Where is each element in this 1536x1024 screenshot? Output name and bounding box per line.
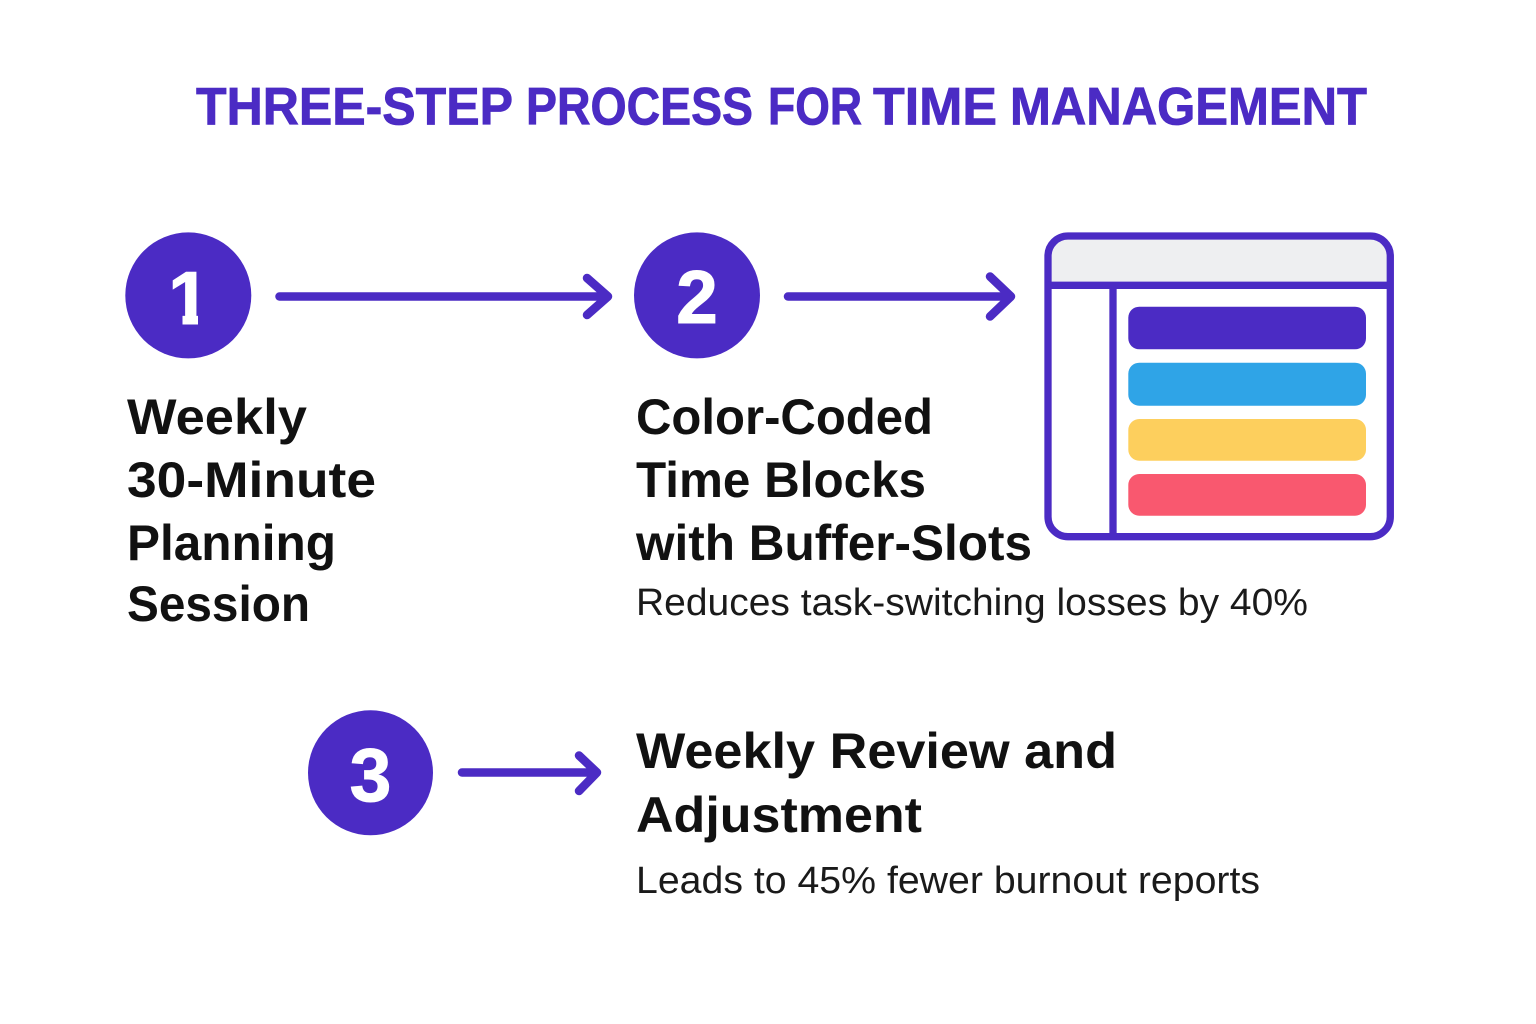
arrow: step 2 to calendar: [788, 276, 1011, 316]
step 1 text: Planning: [127, 515, 336, 571]
step 2 text: with Buffer-Slots: [635, 515, 1032, 571]
step 3 badge: [308, 710, 433, 835]
title: MANAGEMENT: [1010, 78, 1367, 136]
step 1 text: Session: [127, 576, 310, 632]
title: TIME: [873, 78, 997, 136]
title: FOR: [768, 78, 862, 136]
title: PROCESS: [526, 78, 753, 136]
step 2 text: Time Blocks: [636, 452, 926, 508]
step 1 text: Weekly: [127, 389, 307, 445]
step 3 text: Weekly Review and: [636, 723, 1117, 779]
step 3 text: [636, 723, 1117, 843]
arrow: step 3 to text: [462, 756, 597, 791]
step 3 text: Adjustment: [636, 787, 922, 843]
step 1 text: 30-Minute: [127, 452, 376, 508]
step 1 badge: 1: [168, 256, 210, 340]
step 1 badge: [125, 232, 251, 358]
title: THREE-STEP: [196, 78, 513, 136]
title: [196, 78, 1367, 136]
arrow: step 1 to step 2: [280, 278, 608, 315]
step 3 stat: Leads to 45% fewer burnout reports: [636, 860, 1260, 902]
step 1 text: [127, 389, 376, 632]
step 2 badge: 2: [676, 255, 718, 339]
step 3 badge: 3: [350, 733, 391, 817]
step 2 stat: Reduces task-switching losses by 40%: [636, 582, 1308, 624]
step 2 text: [635, 389, 1032, 571]
step 2 text: Color-Coded: [636, 389, 933, 445]
icon: calendar with colour-coded time blocks: [1048, 236, 1390, 537]
step 2 badge: [634, 232, 760, 358]
